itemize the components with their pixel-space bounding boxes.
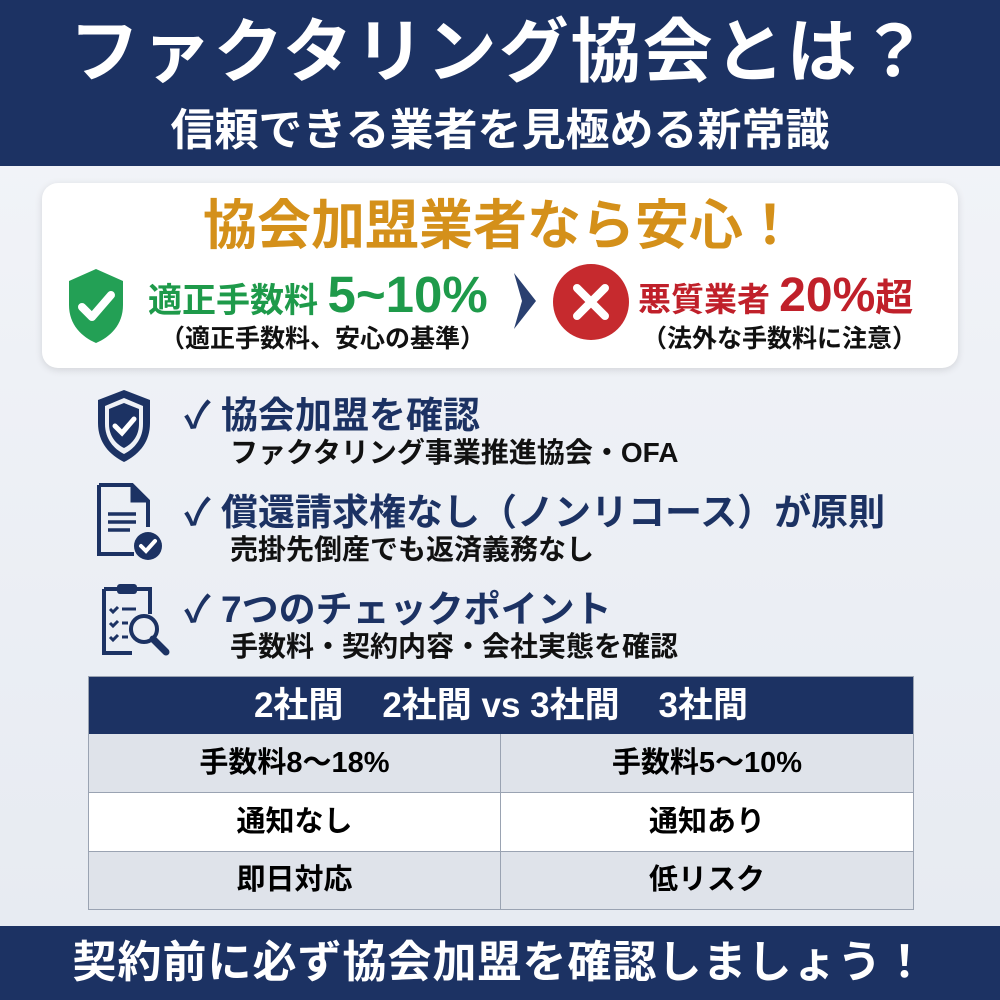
row 2: 通知あり [649,806,765,838]
text: bad vendor: 悪質業者 20%超 [638,269,913,322]
heading: ✓ 7つのチェックポイント [184,589,612,630]
icon: red x circle [553,264,629,340]
row 3: 低リスク [649,864,765,896]
row 1: 手数料8〜18% [199,747,390,779]
row 1 [89,734,913,793]
item 2 [97,483,885,565]
row 1: 手数料5〜10% [612,747,802,779]
heading: ✓ 償還請求権なし（ノンリコース）が原則 [184,492,885,533]
subtext: 手数料・契約内容・会社実態を確認 [230,631,678,662]
heading: safe: 協会加盟業者なら安心！ [203,196,797,256]
row 2: 通知なし [236,806,352,838]
icon: clipboard magnifier [102,584,170,656]
row 3 [89,852,913,909]
row 2 [89,793,913,852]
arrow: chevron [514,273,536,329]
header band [0,0,1000,166]
table header [89,677,913,734]
subtext: ファクタリング事業推進協会・OFA [230,437,678,468]
item 1 [98,390,678,468]
text: proper fee note: （適正手数料、安心の基準） [160,325,485,353]
text: proper fee: 適正手数料 5~10% [148,266,488,323]
subtitle: 信頼できる業者を見極める新常識 [170,106,830,155]
icon: document check [97,483,162,560]
panel: fee comparison card [42,183,958,368]
subtext: 売掛先倒産でも返済義務なし [230,534,594,565]
comparison table [88,676,914,910]
item 3 [102,584,678,662]
footer banner [0,926,1000,1000]
icon: green shield [69,269,123,343]
footer banner: 契約前に必ず協会加盟を確認しましょう！ [72,938,928,987]
heading: ✓ 協会加盟を確認 [184,395,480,436]
title: ファクタリング協会とは？ [69,13,931,91]
table header: 2社間 2社間 vs 3社間 3社間 [254,686,748,725]
text: bad vendor note: （法外な手数料に注意） [642,325,917,353]
row 3: 即日対応 [236,864,352,896]
icon: shield [98,390,150,462]
